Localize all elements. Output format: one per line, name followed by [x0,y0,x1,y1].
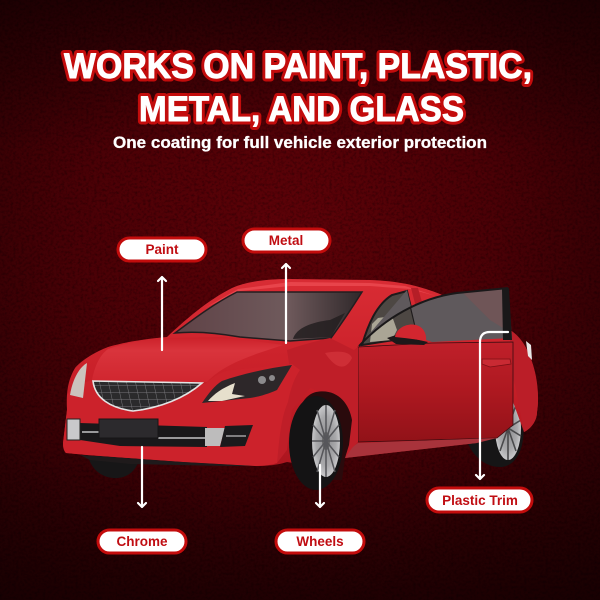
label: paint: Paint [145,242,179,257]
right headlight [202,365,292,403]
rear tail light [526,341,532,360]
door glass dark pillar [502,288,512,340]
title: METAL, AND GLASS [139,90,464,129]
front fascia [63,364,300,466]
subtitle: One coating for full vehicle exterior protection [113,133,487,152]
label: metal: Metal [269,233,303,248]
rear body panel [510,330,538,432]
right fog light [205,428,225,446]
car body silhouette [63,279,538,470]
windshield interior [293,313,345,339]
arrow: metal [282,264,290,343]
side mirror [387,324,428,345]
license plate [99,419,158,438]
front fender [250,338,358,463]
seat [370,316,397,342]
open door glass [359,288,512,346]
chrome strips [82,432,205,438]
red pillar [411,288,432,338]
icon: front wheel [289,396,343,490]
lower grille [80,423,207,447]
arrow: chrome [138,447,146,507]
hood [92,337,283,382]
roof highlight [205,282,436,308]
title: WORKS ON PAINT, PLASTIC, [64,47,532,86]
door handle [482,359,511,367]
under bumper [80,455,255,466]
label: plastic trim [427,488,532,512]
label: chrome [98,530,186,553]
title [64,47,532,129]
label: paint [118,238,206,261]
label: metal [243,229,330,252]
arrow: paint [158,277,166,350]
label: wheels: Wheels [296,534,344,549]
wheel arch [292,391,352,480]
label: plastic trim: Plastic Trim [442,493,518,508]
right vent [220,425,253,447]
door sill [345,438,497,458]
door glass upper tint [462,289,503,328]
door glass arc frame [359,288,508,346]
door panel [358,342,513,442]
title: WORKS ON PAINT, PLASTIC, [64,47,532,86]
label: wheels [276,530,364,553]
arrow: wheels [316,465,324,507]
left fog light [67,419,80,440]
icon: far front wheel [88,456,140,478]
windshield [175,292,362,341]
icon: rear wheel [465,380,524,467]
fender highlight [325,352,352,367]
front grille [93,381,202,411]
vent chrome [226,435,246,437]
arrow: plastic trim [476,332,508,479]
car [63,279,538,490]
title: METAL, AND GLASS [139,90,464,129]
label: chrome: Chrome [116,534,168,549]
front side window [362,291,418,345]
left headlight [70,363,87,398]
